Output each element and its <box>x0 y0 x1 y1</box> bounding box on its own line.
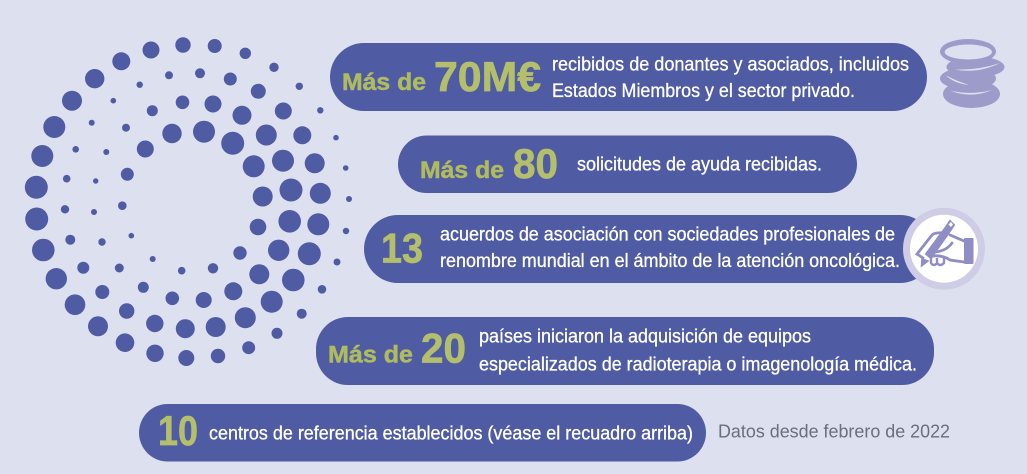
applications figure: 80 <box>513 140 558 187</box>
funding description: Estados Miembros y el sector privado. <box>552 81 855 102</box>
reference centres figure: 10 <box>158 407 198 454</box>
applications description: solicitudes de ayuda recibidas. <box>577 155 822 176</box>
reference centres description: centros de referencia establecidos (véase el recuadro arriba) <box>209 423 693 444</box>
panel: funding pill <box>330 43 927 111</box>
funding figure: Más de <box>342 69 426 96</box>
countries figure: 20 <box>421 325 466 372</box>
countries description: países iniciaron la adquisición de equipos <box>479 327 811 348</box>
panel: partnership pill <box>364 215 934 283</box>
partnership figure: 13 <box>381 224 423 271</box>
countries description <box>479 327 917 376</box>
dotted circular graphic <box>25 37 352 366</box>
icon: coin stack <box>940 39 1004 108</box>
applications figure <box>420 140 558 187</box>
panel: countries pill <box>316 317 934 385</box>
date note: Datos desde febrero de 2022 <box>718 422 950 442</box>
applications figure: Más de <box>420 157 504 184</box>
countries figure: Más de <box>328 342 413 369</box>
funding figure: 70M€ <box>434 53 541 100</box>
panel: reference centres pill <box>139 404 706 462</box>
funding description: recibidos de donantes y asociados, incluidos <box>552 54 909 76</box>
countries figure <box>328 325 466 372</box>
partnership description <box>440 225 900 272</box>
partnership description: renombre mundial en el ámbito de la atención oncológica. <box>440 251 900 272</box>
funding figure <box>342 53 541 100</box>
panel: applications pill <box>398 136 857 193</box>
countries description: especializados de radioterapia o imagenología médica. <box>479 355 917 376</box>
partnership description: acuerdos de asociación con sociedades profesionales de <box>440 225 895 246</box>
funding description <box>552 54 909 102</box>
icon: hand signing <box>903 208 985 290</box>
